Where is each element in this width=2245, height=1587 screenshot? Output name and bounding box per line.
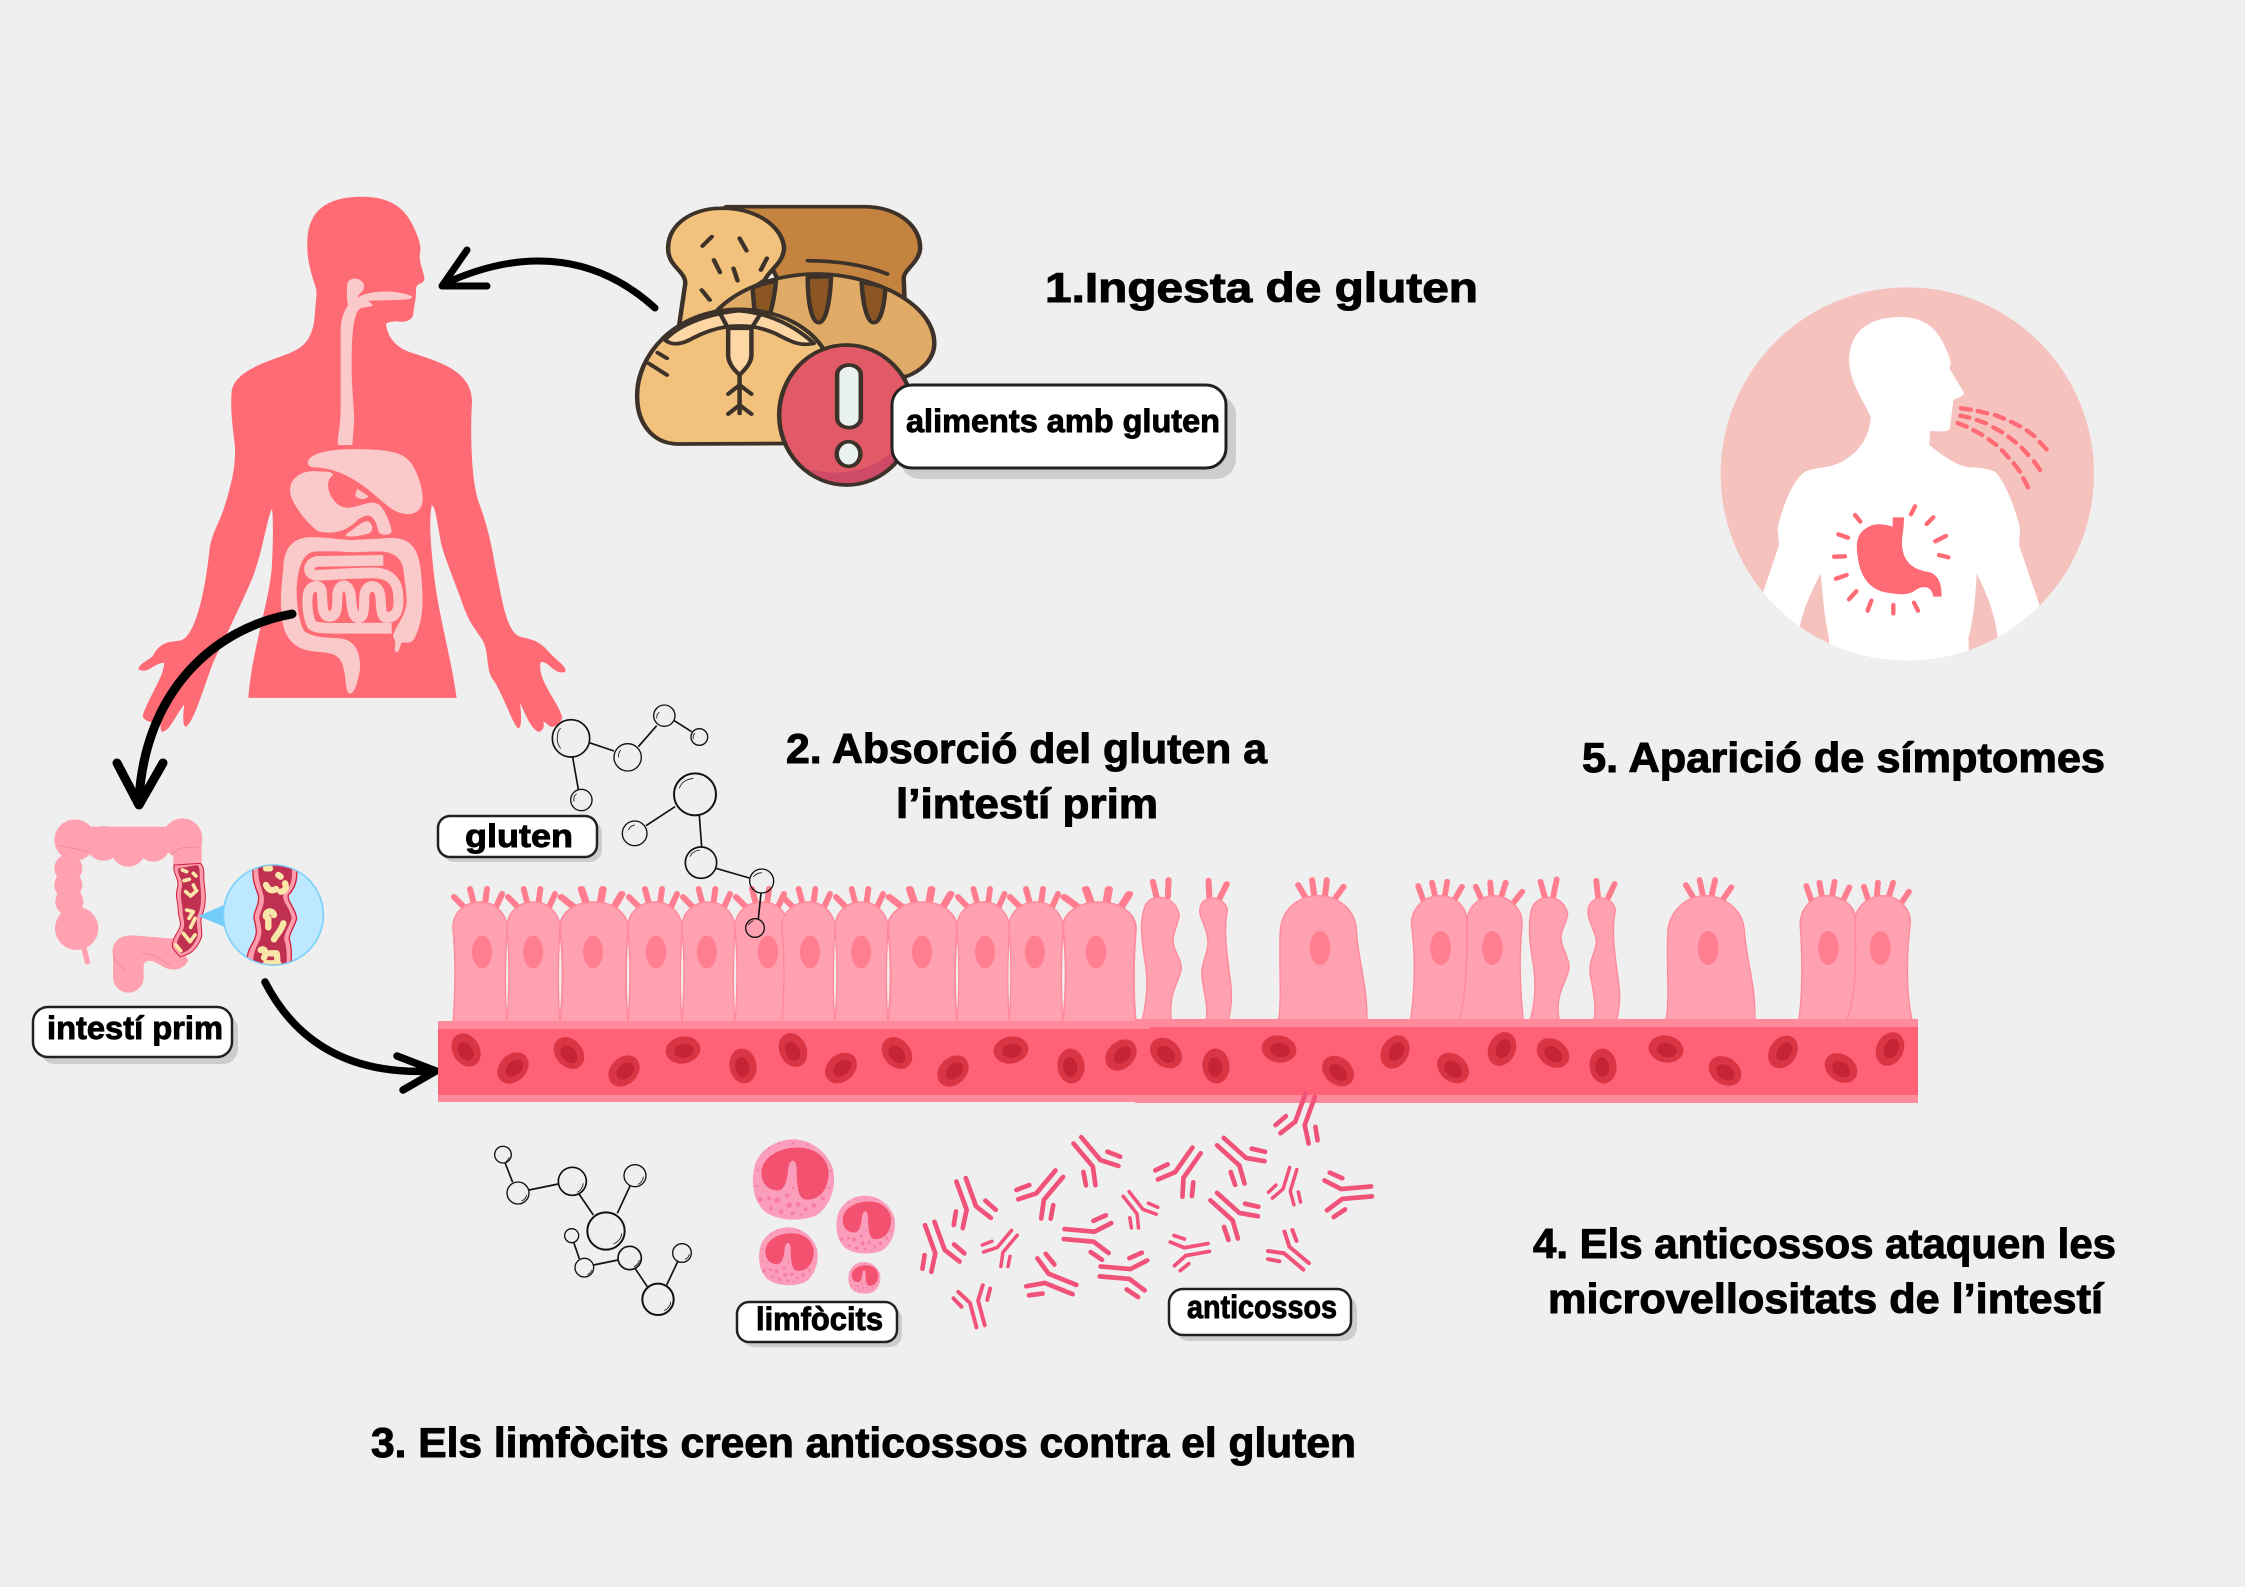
pancreas and gallbladder — [346, 489, 372, 536]
colon folds — [58, 845, 198, 969]
round loaf — [716, 274, 934, 377]
label: intestí prim: intestí prim — [47, 1010, 223, 1046]
heading: step 3: 3. Els limfòcits creen anticossos contra el gluten — [371, 1419, 1356, 1466]
gluten molecules, below vessel — [495, 1146, 691, 1315]
magnified intestine — [247, 865, 297, 967]
magnifier lens — [223, 865, 323, 965]
arrow: from bread to mouth — [442, 250, 655, 308]
magnifier pointer — [198, 905, 224, 927]
bread slice — [668, 208, 784, 325]
arrow: from small intestine to villi — [265, 982, 436, 1090]
label: anticossos — [1169, 1289, 1357, 1341]
stomach — [290, 471, 392, 535]
esophagus — [338, 279, 412, 445]
molecule D — [565, 1229, 691, 1315]
heading: step 2, second line: l’intestí prim — [896, 780, 1158, 827]
colon body — [54, 818, 202, 993]
icon: person with stomach symptoms — [1721, 287, 2094, 670]
large intestine — [281, 537, 423, 694]
blood vessel — [438, 1019, 1918, 1103]
arrow: from body to small intestine — [117, 614, 292, 805]
molecule B — [622, 773, 774, 937]
pain rays — [1834, 506, 1948, 613]
molecule A — [552, 705, 708, 811]
warning sign — [779, 345, 914, 485]
damaged villi, middle — [1141, 880, 1367, 1020]
heading: step 4: 4. Els anticossos ataquen les — [1533, 1220, 2116, 1267]
label: limfòcits — [737, 1301, 902, 1347]
icon: human body with digestive system — [138, 197, 566, 732]
back loaf — [726, 207, 920, 297]
label: gluten — [438, 816, 602, 862]
intestinal villi and blood vessel — [438, 879, 1918, 1103]
icon: antibodies — [909, 1088, 1373, 1331]
cut section of intestine — [172, 863, 205, 957]
gluten molecules near the villi — [552, 705, 774, 937]
small intestine — [307, 560, 398, 628]
label: limfòcits: limfòcits — [756, 1301, 883, 1337]
label: intestí prim — [33, 1007, 238, 1064]
icon: bread with warning sign — [637, 207, 934, 485]
heading: step 4, second line: microvellositats de l’intestí — [1548, 1275, 2104, 1322]
heading: step 2: 2. Absorció del gluten a — [786, 725, 1268, 772]
heading: step 1: 1.Ingesta de gluten — [1045, 264, 1478, 311]
breath dashes — [1958, 408, 2047, 487]
damaged villi, right — [1410, 879, 1912, 1020]
heading: step 5: 5. Aparició de símptomes — [1582, 734, 2105, 781]
label: anticossos: anticossos — [1187, 1289, 1337, 1325]
label: gluten: gluten — [465, 818, 573, 854]
healthy villi cells — [453, 889, 1136, 1023]
red blood cells — [446, 1027, 1910, 1093]
liver — [308, 449, 423, 514]
front bun — [637, 309, 824, 444]
label: aliments amb gluten — [892, 385, 1236, 479]
molecule C — [495, 1146, 646, 1250]
stomach — [1857, 517, 1942, 597]
circle background — [1721, 287, 2094, 661]
icon: small intestine colon with magnifier — [54, 818, 323, 993]
label: aliments amb gluten: aliments amb gluten — [906, 403, 1220, 439]
icon: lymphocytes — [753, 1139, 895, 1294]
person silhouette — [1763, 317, 2040, 660]
